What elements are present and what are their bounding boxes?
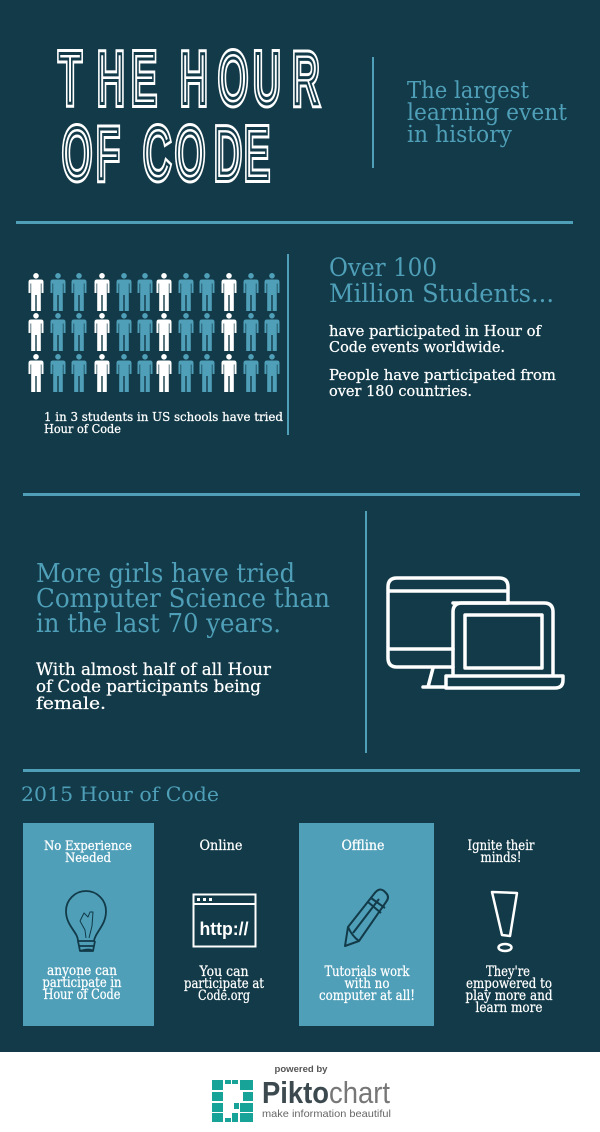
panel: no experience needed: No Experience [44,839,132,854]
panel: online: You can [199,964,248,980]
footer [0,1052,600,1132]
title: OF CODE [63,115,269,195]
title: OF CODE [63,115,269,195]
subtitle: The largest [407,78,530,104]
heading: more girls [36,559,330,639]
logo mark [212,1080,253,1122]
panel: ignite their minds: They're [486,964,530,980]
subtitle [407,78,568,148]
panel: no experience needed: Needed [65,851,111,866]
heading: over 100 million students: Over 100 [329,253,437,282]
icon: browser window [193,894,256,946]
text: participation: People have participated from [329,366,556,384]
panel: online: Code.org [198,988,250,1004]
title [59,40,319,195]
title: THE HOUR [59,40,319,120]
icon: desktop and laptop [388,578,563,688]
panel: online: participate at [184,976,264,992]
panel: offline: with no [344,976,390,992]
caption: 1 in 3 students: Hour of Code [44,421,121,436]
logo wordmark: make information beautiful [262,1108,391,1120]
panel: no experience needed: anyone can [47,963,117,979]
icon: browser window: http:// [200,919,248,939]
text: almost half: female. [36,694,106,714]
heading: over 100 million students [329,253,554,308]
panel: online [184,838,264,1004]
text: participation: over 180 countries. [329,382,472,400]
panel: ignite their minds: learn more [476,1000,542,1016]
caption: 1 in 3 students: 1 in 3 students in US schools have tried [44,409,283,424]
panel: ignite their minds: Ignite their [468,838,535,854]
text: almost half: With almost half of all Hour [36,660,272,680]
icon: exclamation mark [492,892,517,951]
subtitle: learning event [407,100,568,126]
text: participation: have participated in Hour of [329,322,542,340]
heading: 2015 hour of code: 2015 Hour of Code [21,782,219,806]
heading: more girls: More girls have tried [36,559,295,589]
panel: offline: computer at all! [319,988,415,1004]
subtitle: in history [407,122,512,148]
text: participation [329,322,556,400]
panel: ignite their minds: minds! [480,850,522,866]
panel: offline [299,823,434,1026]
panel: no experience needed: participate in [42,975,122,991]
caption: 1 in 3 students [44,409,283,436]
footer: powered by [274,1064,328,1075]
panel: no experience needed [23,823,154,1026]
pictogram: students [28,273,280,392]
panel: offline: Offline [342,838,384,854]
icon: light bulb [66,891,106,951]
panel: ignite their minds [466,838,553,1016]
heading: more girls: in the last 70 years. [36,609,281,639]
panel: online: Online [200,838,242,854]
panel: ignite their minds: empowered to [466,976,552,992]
title: THE HOUR [59,40,319,120]
panel: ignite their minds: play more and [466,988,553,1004]
panel: offline: Tutorials work [324,964,410,980]
logo wordmark: Piktochart [262,1075,390,1110]
panel: no experience needed: Hour of Code [44,987,120,1003]
heading: over 100 million students: Million Students... [329,279,554,308]
icon: pencil [345,890,388,946]
text: almost half [36,660,272,714]
text: participation: Code events worldwide. [329,338,505,356]
heading: more girls: Computer Science than [36,584,330,614]
text: almost half: of Code participants being [36,677,261,697]
